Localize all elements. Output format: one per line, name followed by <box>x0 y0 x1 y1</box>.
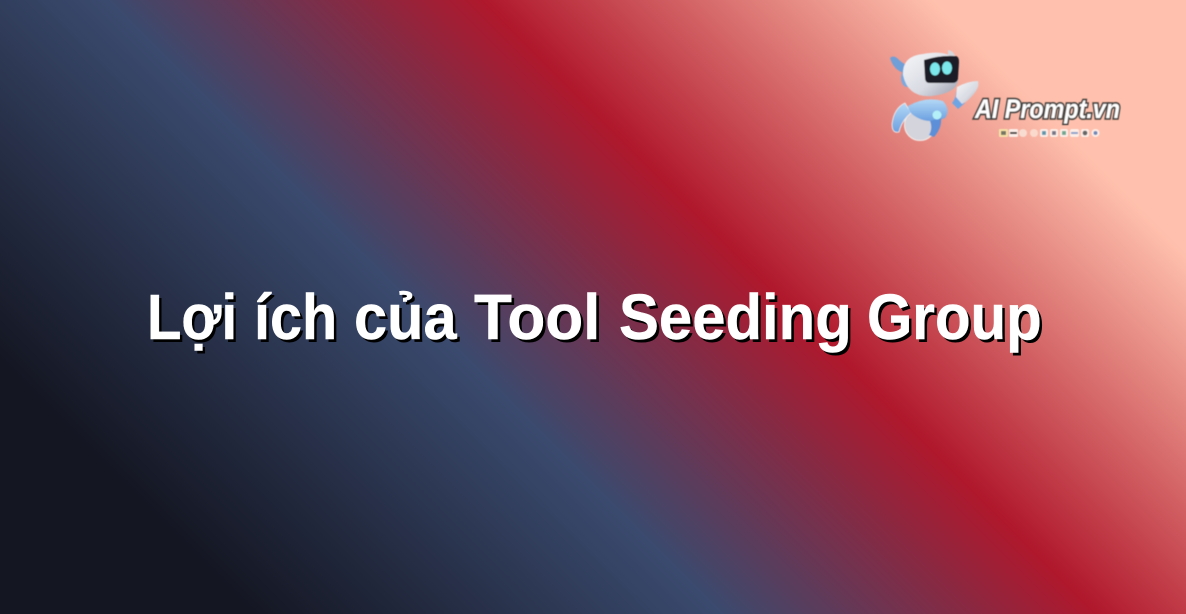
title: Group <box>867 281 1042 353</box>
logo: AI Prompt.vn robot <box>890 50 1122 142</box>
icon row <box>999 129 1100 137</box>
title: Tool <box>474 281 600 353</box>
icon: robot <box>890 50 978 140</box>
title: ích <box>254 281 337 353</box>
title: Seeding <box>619 281 852 353</box>
title: Lợi <box>147 281 237 353</box>
title: của <box>354 281 457 353</box>
title <box>147 281 1042 356</box>
